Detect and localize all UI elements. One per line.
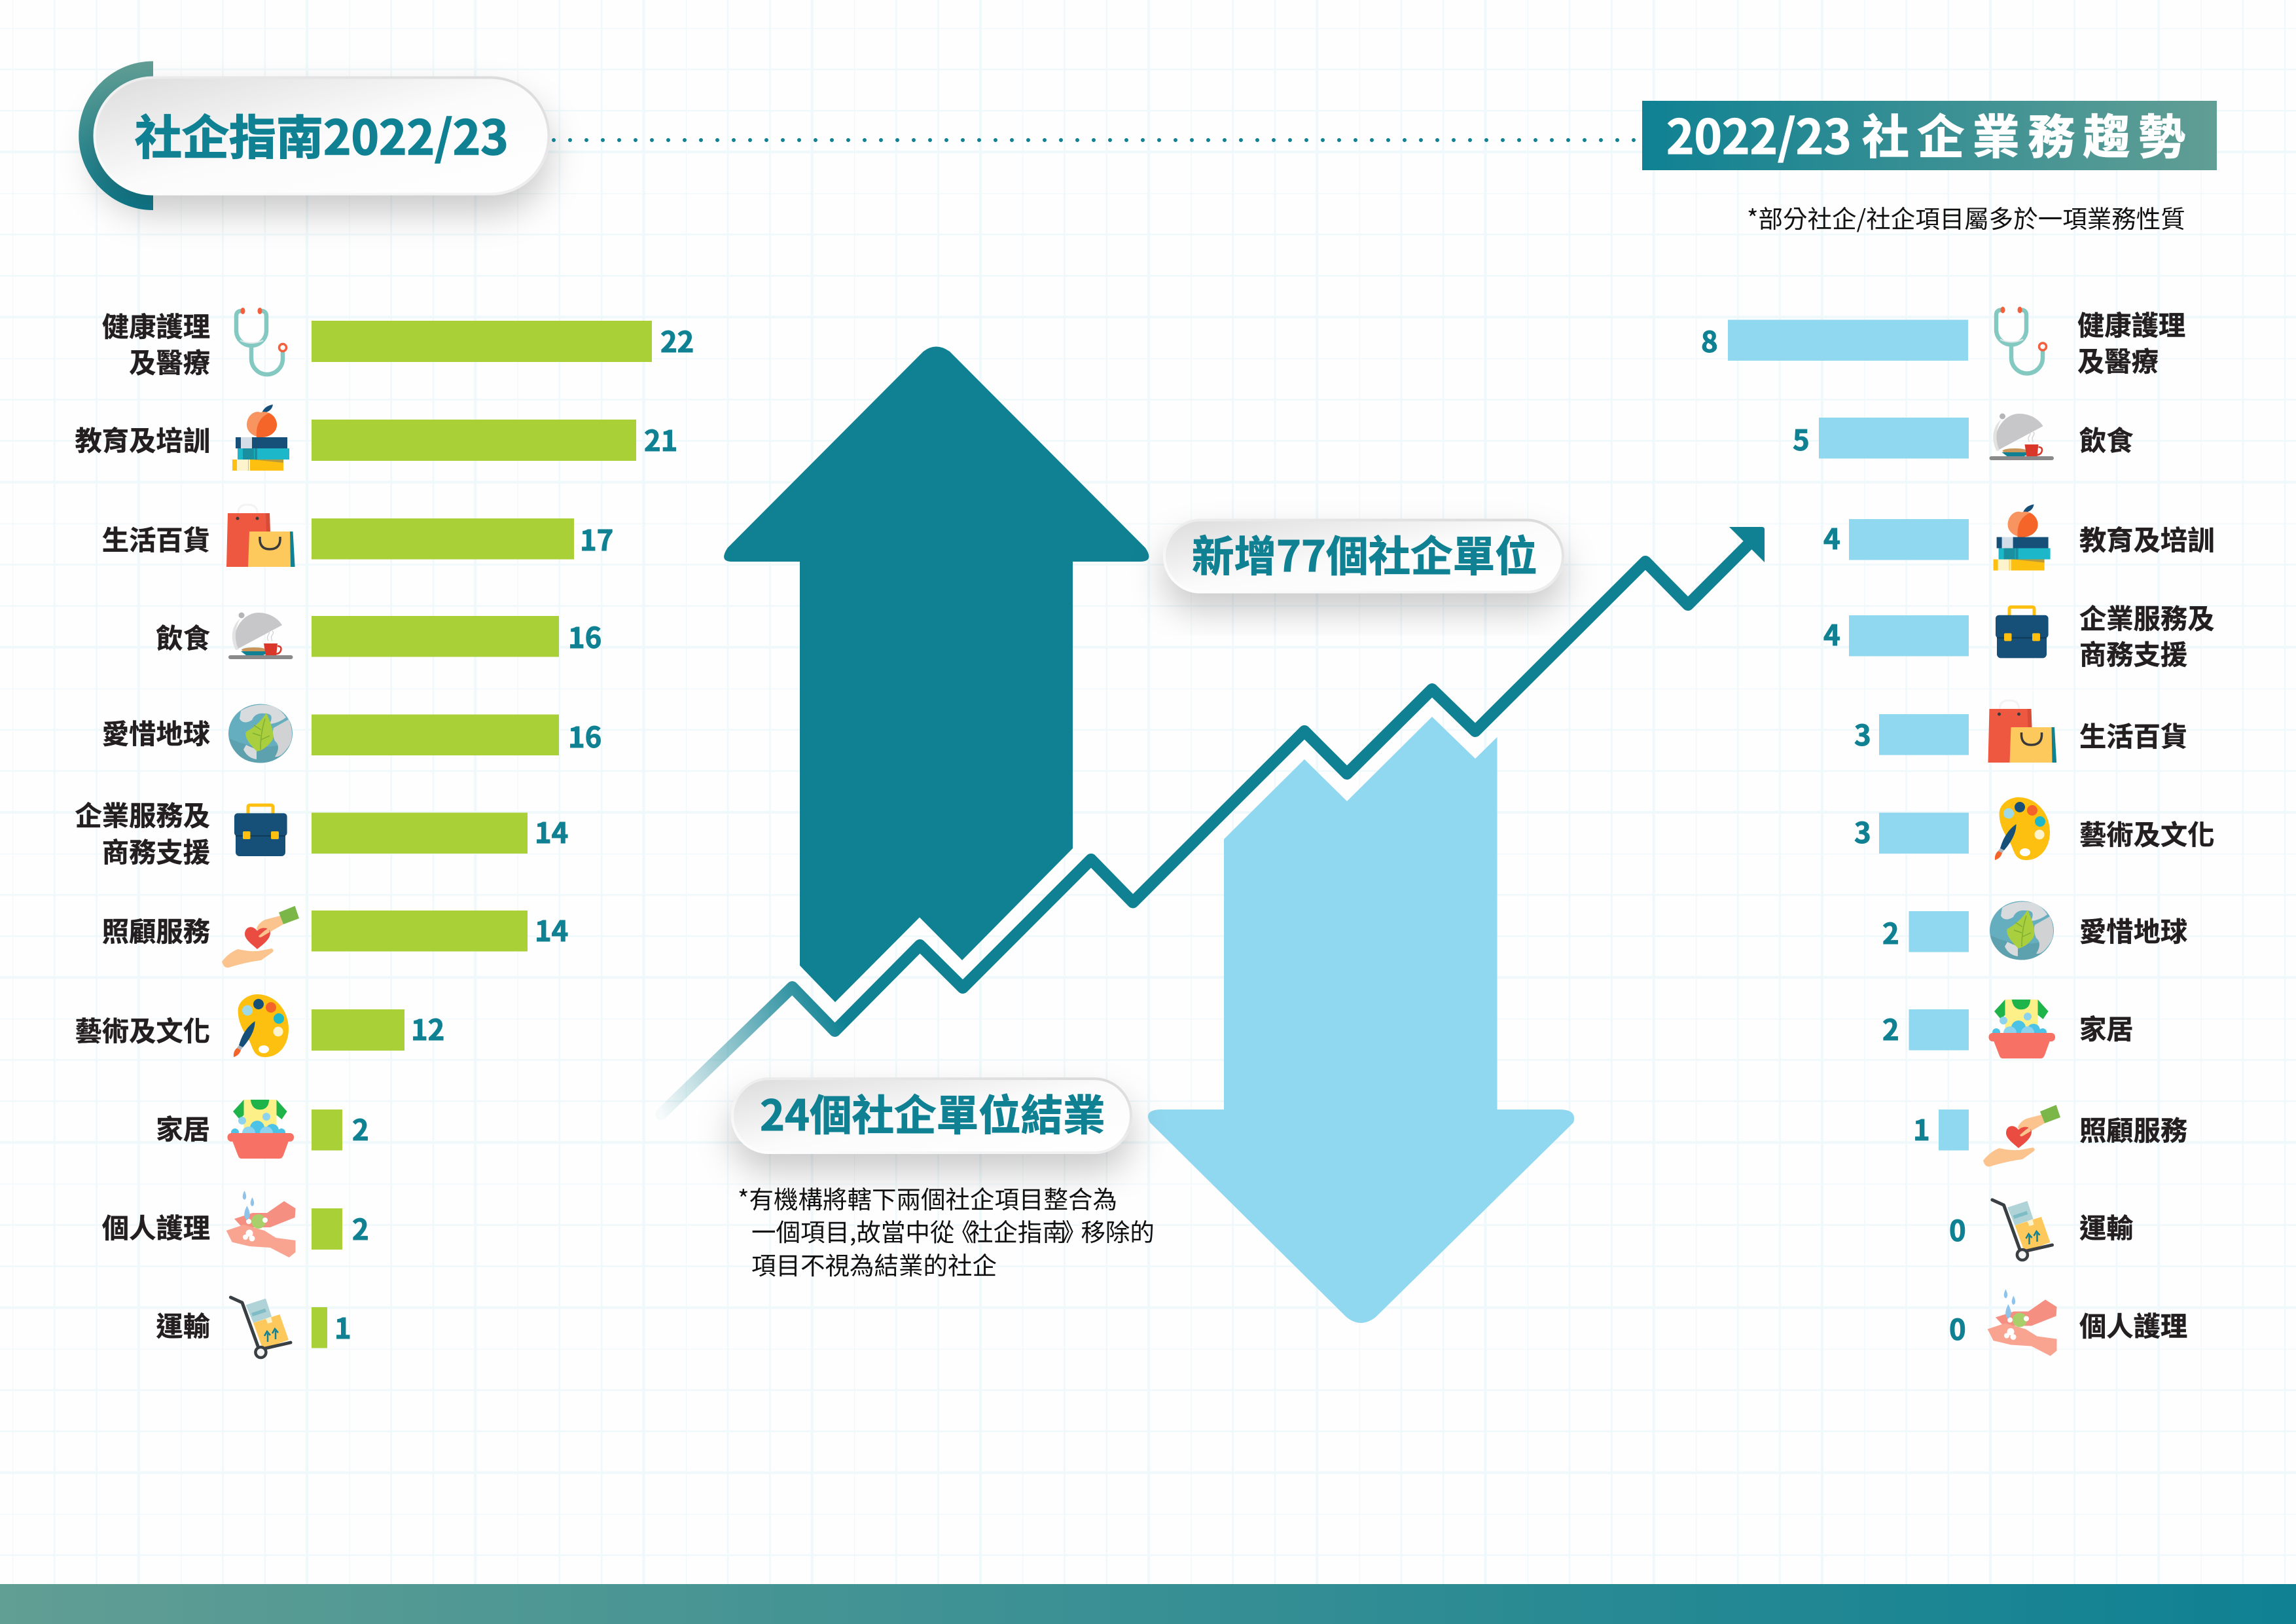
arrow: up [724, 347, 1149, 1002]
row: 企業服務及商務支援 [75, 794, 568, 870]
row: 運輸: 運輸 [2079, 1206, 2134, 1246]
arrow: down [1148, 717, 1574, 1323]
footnote: closed: 項目不視為結業的社企 [751, 1246, 997, 1282]
row: 家居: 2 [352, 1108, 369, 1149]
row: 照顧服務: 1 [1913, 1108, 1930, 1149]
row: 飲食 [156, 613, 601, 659]
row: 家居: 2 [1882, 1007, 1899, 1049]
title pill teal arc [79, 62, 153, 210]
row: 家居 [1882, 1000, 2134, 1058]
row: 健康護理及醫療: 健康護理 [2077, 304, 2185, 343]
row: 教育及培訓: 教育及培訓 [75, 419, 210, 458]
row: 教育及培訓: 教育及培訓 [2079, 518, 2215, 558]
row: 教育及培訓 [75, 405, 677, 471]
callout text: 新增77個社企單位 [1192, 522, 1537, 584]
row: 個人護理: 個人護理 [102, 1206, 210, 1246]
row: 教育及培訓: 4 [1823, 516, 1840, 558]
row: 藝術及文化 [75, 994, 444, 1057]
row: 個人護理: 0 [1949, 1307, 1966, 1348]
row: 愛惜地球: 16 [568, 715, 601, 756]
row: 生活百貨 [102, 505, 613, 567]
footnote: closed: *有機構將轄下兩個社企項目整合為 [738, 1180, 1117, 1216]
header: trend banner [1642, 99, 2217, 170]
row: 愛惜地球 [102, 704, 601, 763]
row: 企業服務及商務支援: 商務支援 [102, 831, 210, 870]
row: 運輸: 運輸 [156, 1305, 210, 1344]
row: 藝術及文化: 藝術及文化 [75, 1009, 210, 1049]
row: 生活百貨: 生活百貨 [2079, 715, 2187, 754]
row: 藝術及文化: 藝術及文化 [2079, 813, 2215, 852]
row: 健康護理及醫療 [1701, 304, 2185, 379]
row: 生活百貨 [1854, 700, 2187, 763]
row: 家居: 家居 [2079, 1007, 2134, 1047]
row: 個人護理: 個人護理 [2079, 1305, 2187, 1344]
trend line stroke [661, 544, 1749, 1114]
row: 健康護理及醫療: 8 [1701, 319, 1718, 361]
row: 藝術及文化: 12 [411, 1007, 444, 1049]
callout: closed [732, 1079, 1131, 1153]
row: 個人護理 [1949, 1290, 2187, 1356]
banner background [1642, 101, 2217, 170]
row: 飲食: 5 [1793, 418, 1810, 459]
row: 藝術及文化 [1854, 797, 2215, 860]
row: 家居 [156, 1100, 369, 1159]
row: 企業服務及商務支援: 企業服務及 [2079, 597, 2215, 636]
row: 飲食: 16 [568, 615, 601, 657]
row: 企業服務及商務支援: 14 [535, 810, 568, 852]
row: 藝術及文化: 3 [1854, 810, 1871, 852]
row: 照顧服務: 照顧服務 [2079, 1109, 2187, 1148]
callout text: 24個社企單位結業 [760, 1081, 1105, 1143]
chart: right bars [1701, 304, 2215, 1356]
row: 企業服務及商務支援 [1823, 597, 2215, 672]
row: 愛惜地球: 2 [1882, 911, 1899, 952]
callout pill [732, 1079, 1131, 1153]
row: 運輸: 0 [1949, 1208, 1966, 1250]
row: 運輸 [1949, 1200, 2134, 1260]
row: 企業服務及商務支援: 商務支援 [2079, 633, 2187, 672]
callout: new [1164, 520, 1563, 592]
callout pill [1164, 520, 1563, 592]
footnote: closed: 一個項目,故當中從 [751, 1212, 954, 1248]
row: 生活百貨: 生活百貨 [102, 518, 210, 558]
row: 家居: 家居 [156, 1108, 210, 1147]
chart: left bars [75, 305, 694, 1358]
row: 企業服務及商務支援: 企業服務及 [75, 794, 210, 833]
row: 照顧服務 [1913, 1105, 2187, 1166]
row: 教育及培訓: 21 [644, 418, 677, 460]
title: 社企指南2022/23 [135, 99, 509, 168]
footnote: trend: *部分社企/社企項目屬多於一項業務性質 [1747, 199, 2185, 235]
row: 運輸: 1 [334, 1306, 351, 1347]
dotted connector [554, 138, 1636, 142]
trend line arrowhead [1729, 527, 1765, 562]
row: 教育及培訓 [1823, 504, 2215, 571]
row: 生活百貨: 3 [1854, 713, 1871, 754]
row: 個人護理 [102, 1191, 369, 1257]
row: 企業服務及商務支援: 4 [1823, 613, 1840, 654]
footnote: closed: 《社企指南》移除的 [949, 1212, 1155, 1248]
banner title: 2022/23 [1666, 99, 1852, 168]
row: 愛惜地球: 愛惜地球 [102, 712, 210, 751]
row: 照顧服務 [102, 906, 568, 967]
footer band [0, 1584, 2296, 1624]
row: 愛惜地球: 愛惜地球 [2079, 910, 2187, 949]
row: 照顧服務: 14 [535, 909, 568, 950]
row: 個人護理: 2 [352, 1207, 369, 1248]
row: 健康護理及醫療 [102, 305, 694, 380]
title pill body [94, 77, 548, 194]
banner title: 社企業務趨勢 [1862, 99, 2193, 168]
row: 照顧服務: 照顧服務 [102, 910, 210, 949]
row: 飲食: 飲食 [156, 617, 210, 656]
row: 飲食: 飲食 [2079, 419, 2134, 458]
row: 健康護理及醫療: 健康護理 [102, 305, 210, 344]
row: 飲食 [1793, 414, 2134, 460]
header: title pill [79, 62, 549, 210]
row: 生活百貨: 17 [580, 518, 613, 559]
row: 健康護理及醫療: 及醫療 [129, 341, 210, 380]
row: 愛惜地球 [1882, 901, 2187, 960]
row: 健康護理及醫療: 22 [660, 319, 694, 361]
row: 運輸 [156, 1297, 351, 1358]
trend line [661, 527, 1765, 1114]
row: 健康護理及醫療: 及醫療 [2077, 340, 2159, 379]
